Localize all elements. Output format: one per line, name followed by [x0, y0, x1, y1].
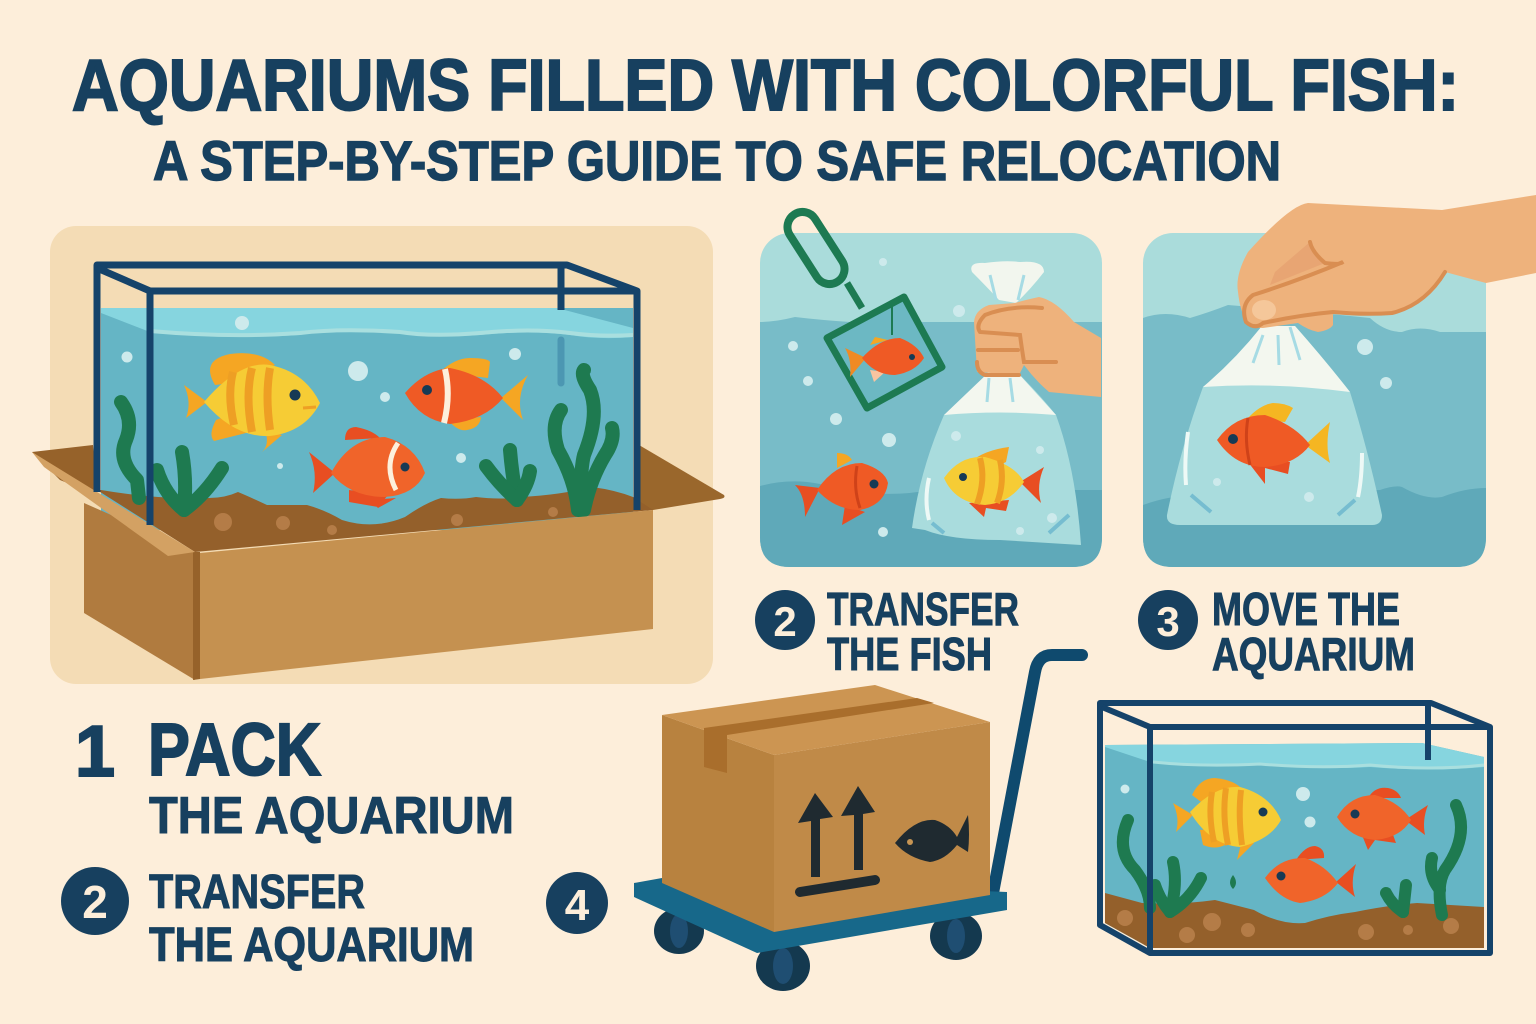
- step 2 upper label: TRANSFER: [827, 583, 1019, 635]
- step 1 label: [75, 708, 514, 845]
- icon: up arrows: [798, 786, 875, 892]
- plants: [121, 370, 613, 510]
- icon: fish: [895, 815, 969, 862]
- clownfish top: [405, 358, 528, 430]
- step 3 label: MOVE THE: [1212, 583, 1400, 635]
- box inner flap left: [32, 445, 97, 495]
- panel: move the aquarium: [1143, 195, 1536, 567]
- step 1 label: PACK: [148, 708, 321, 791]
- bubbles: [1120, 784, 1316, 828]
- step 4 badge: 4: [565, 881, 590, 930]
- box inner flap right: [639, 445, 724, 510]
- step 2 lower label: 2: [82, 876, 108, 928]
- red fish: [309, 427, 425, 508]
- glass frame: [1100, 703, 1490, 953]
- gravel stones: [214, 507, 558, 535]
- back post under water: [558, 340, 564, 383]
- cart handle: [993, 655, 1082, 893]
- subtitle: A STEP-BY-STEP GUIDE TO SAFE RELOCATION: [153, 129, 1281, 192]
- finished aquarium: [1100, 703, 1490, 953]
- red fish: [795, 453, 888, 525]
- glass frame: [97, 265, 637, 525]
- step 4 badge: [546, 872, 608, 934]
- plants: [1123, 805, 1461, 915]
- step 3 label: AQUARIUM: [1212, 628, 1415, 680]
- red fish top: [1337, 788, 1428, 850]
- icon: green net: [782, 206, 942, 408]
- step 2 upper label: THE FISH: [827, 628, 992, 680]
- bubbles: [788, 258, 1057, 537]
- plastic bag with fish: [1167, 326, 1382, 525]
- panel: transfer the fish: [760, 206, 1102, 567]
- gravel: [97, 487, 653, 552]
- cardboard box: [32, 452, 653, 680]
- drop: [1230, 875, 1236, 889]
- hand cart with box: [634, 655, 1082, 991]
- bag and fish: [912, 261, 1081, 545]
- gravel: [1105, 893, 1484, 948]
- step 3 label: [1138, 583, 1415, 680]
- hand: [974, 297, 1101, 397]
- step 1 label: THE AQUARIUM: [149, 787, 514, 845]
- yellow fish: [1173, 778, 1281, 860]
- yellow fish: [184, 353, 320, 452]
- step 2 upper label: [755, 583, 1019, 680]
- red fish bottom: [1265, 846, 1356, 903]
- bubbles: [122, 316, 521, 469]
- water: [1105, 743, 1484, 948]
- bubbles: [1213, 339, 1392, 502]
- cart platform: [634, 878, 1007, 953]
- step 2 lower label: [61, 866, 474, 972]
- water: [101, 308, 633, 530]
- wheels: [654, 908, 982, 991]
- step 2 lower label: TRANSFER: [149, 866, 365, 919]
- hand: [1237, 195, 1536, 332]
- step 3 label: 3: [1156, 598, 1180, 645]
- panel: pack the aquarium illustration: [32, 226, 724, 684]
- step 1 label: 1: [75, 712, 115, 792]
- box: [662, 715, 774, 932]
- step 2 upper label: 2: [773, 598, 797, 645]
- step 2 lower label: THE AQUARIUM: [149, 919, 474, 972]
